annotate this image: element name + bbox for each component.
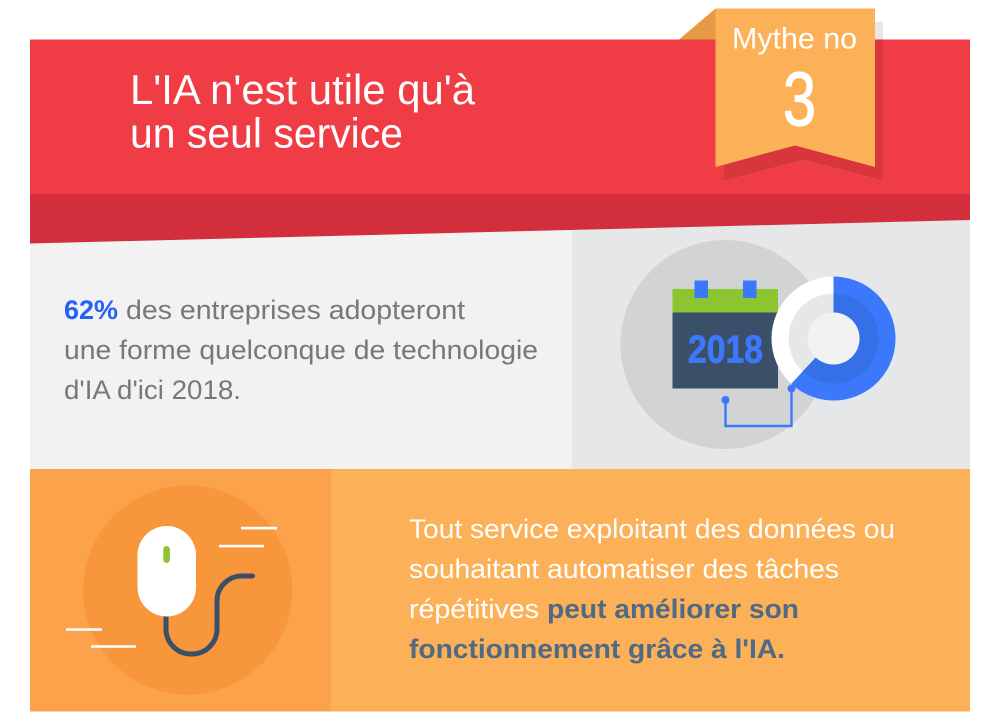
icon: ribbon badge: Mythe no — [732, 22, 857, 56]
text block: statistic: des entreprises adopteront — [126, 295, 466, 325]
text block: conclusion — [409, 514, 895, 664]
text block: conclusion: répétitives — [409, 594, 539, 624]
panel: illustration background — [572, 215, 970, 469]
icon: orange circle backdrop — [83, 486, 292, 694]
panel: statistic background — [30, 215, 572, 469]
heading: title: un seul service — [130, 110, 403, 156]
icon: calendar 2018 — [672, 280, 778, 388]
text block: statistic — [64, 295, 538, 405]
text block: conclusion: Tout service exploitant des données ou — [409, 514, 895, 544]
icon: mouse — [138, 526, 252, 654]
panel: mouse illustration background — [30, 469, 331, 712]
text block: statistic: une forme quelconque de technologie — [64, 335, 538, 365]
icon: ribbon badge: 3 — [783, 58, 816, 142]
panel: conclusion background — [331, 469, 970, 712]
text block: conclusion: peut améliorer son — [547, 594, 799, 624]
text block: statistic: d'IA d'ici 2018. — [64, 375, 241, 405]
icon: connector line — [722, 384, 796, 426]
text block: conclusion: souhaitant automatiser des tâches — [409, 554, 839, 584]
icon: motion lines — [66, 527, 277, 648]
panel: red header — [30, 40, 970, 244]
icon: gray circle backdrop — [620, 240, 830, 449]
icon: ribbon badge — [679, 8, 883, 181]
text block: conclusion: fonctionnement grâce à l'IA. — [409, 634, 785, 664]
heading: title — [130, 66, 476, 156]
text block: statistic: 62% — [64, 295, 118, 325]
chart: donut 62% — [772, 276, 896, 401]
heading: title: L'IA n'est utile qu'à — [130, 66, 476, 113]
icon: calendar 2018: 2018 — [688, 328, 763, 372]
